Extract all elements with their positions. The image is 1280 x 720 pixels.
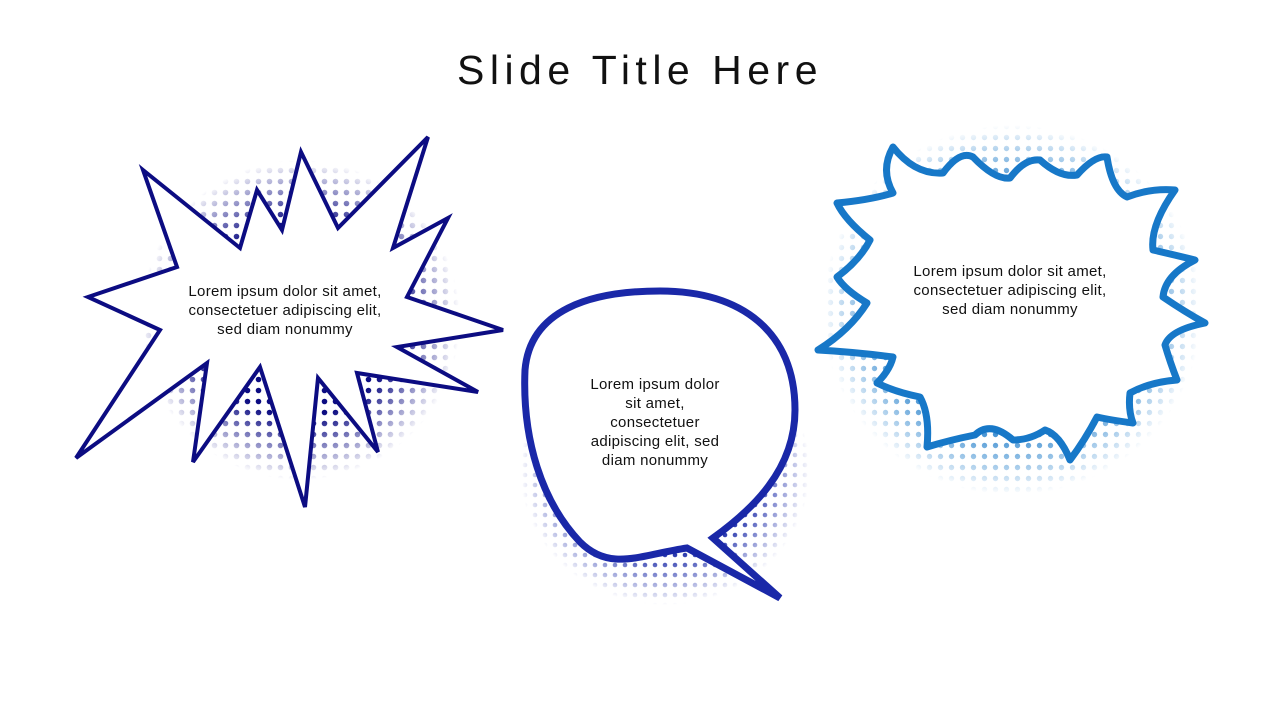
text: middle bubble: consectetuer	[610, 414, 700, 431]
text: left burst: consectetuer adipiscing elit,	[188, 302, 381, 319]
text: middle bubble: diam nonummy	[602, 452, 708, 469]
halftone: middle	[523, 433, 807, 598]
text: middle bubble: sit amet,	[625, 395, 685, 412]
text: left burst	[188, 283, 382, 338]
text: left burst: Lorem ipsum dolor sit amet,	[188, 283, 382, 300]
text: right burst	[913, 263, 1107, 318]
text: right burst: Lorem ipsum dolor sit amet,	[913, 263, 1107, 280]
text: left burst: sed diam nonummy	[217, 321, 353, 338]
halftone: right	[820, 125, 1210, 500]
text: middle bubble	[590, 376, 720, 469]
text: middle bubble: adipiscing elit, sed	[591, 433, 719, 450]
shape: middle speech bubble	[525, 291, 795, 598]
text: right burst: sed diam nonummy	[942, 301, 1078, 318]
title: Slide Title Here	[457, 47, 823, 93]
text: middle bubble: Lorem ipsum dolor	[590, 376, 720, 393]
halftone: left	[146, 168, 458, 478]
text: right burst: consectetuer adipiscing elit,	[914, 282, 1106, 299]
shape: left burst	[76, 137, 503, 507]
shape: right wavy burst	[818, 147, 1205, 460]
